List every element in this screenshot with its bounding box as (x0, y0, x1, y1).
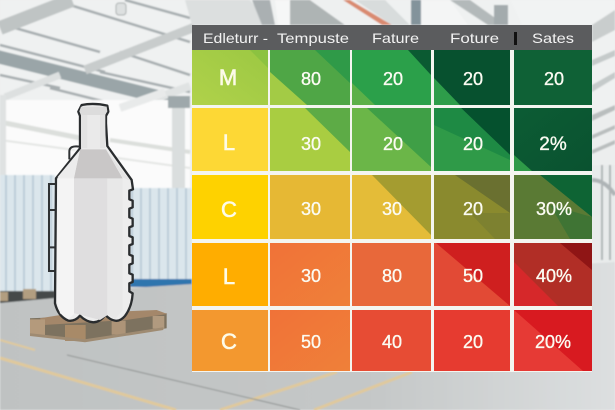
table header: Foture (450, 30, 499, 46)
row L (green): 2% (539, 134, 567, 155)
row L (green): 30 (301, 134, 321, 154)
row L (orange): 40% (536, 266, 572, 286)
icon: bottle (49, 104, 133, 322)
row L (orange): 80 (382, 266, 402, 286)
row L (green): L (223, 130, 235, 155)
table header (192, 25, 592, 50)
row C (yellow): 30 (382, 199, 402, 219)
row M: 80 (301, 69, 321, 89)
row C (yellow): 20 (463, 199, 483, 219)
row C (red): 20% (535, 332, 571, 352)
table panel (192, 25, 592, 372)
bottle facets (74, 178, 107, 320)
row C (red): 40 (382, 332, 402, 352)
row C (yellow): 30% (536, 199, 572, 219)
ceiling (0, 0, 615, 154)
row M (192, 50, 592, 105)
pallet (30, 310, 167, 342)
windows and columns (0, 92, 190, 190)
row C (yellow) (192, 175, 592, 239)
row M: 20 (383, 69, 403, 89)
bottle side ladder (49, 146, 80, 271)
row L (green): 20 (383, 134, 403, 154)
row C (yellow): C (221, 197, 237, 222)
row C (red): C (221, 329, 237, 354)
containers (0, 175, 192, 303)
table header: Edleturr - (203, 30, 268, 46)
table header: Tempuste (277, 30, 349, 46)
row C (red): 50 (301, 332, 321, 352)
row L (green): 20 (463, 134, 483, 154)
row M: M (219, 65, 237, 90)
table header: Sates (532, 30, 574, 46)
floor (0, 262, 615, 410)
row L (green) (192, 108, 592, 171)
row M: 20 (463, 69, 483, 89)
row C (red): 20 (463, 332, 483, 352)
bottle outline and body (55, 104, 133, 322)
row L (orange): 30 (301, 266, 321, 286)
row L (orange): 50 (463, 266, 483, 286)
table header: Fature (372, 30, 419, 46)
row M: 20 (544, 69, 564, 89)
row L (orange) (192, 243, 592, 306)
row C (red) (192, 310, 592, 371)
floor lines (0, 340, 412, 410)
row L (orange): L (223, 264, 235, 289)
row C (yellow): 30 (301, 199, 321, 219)
